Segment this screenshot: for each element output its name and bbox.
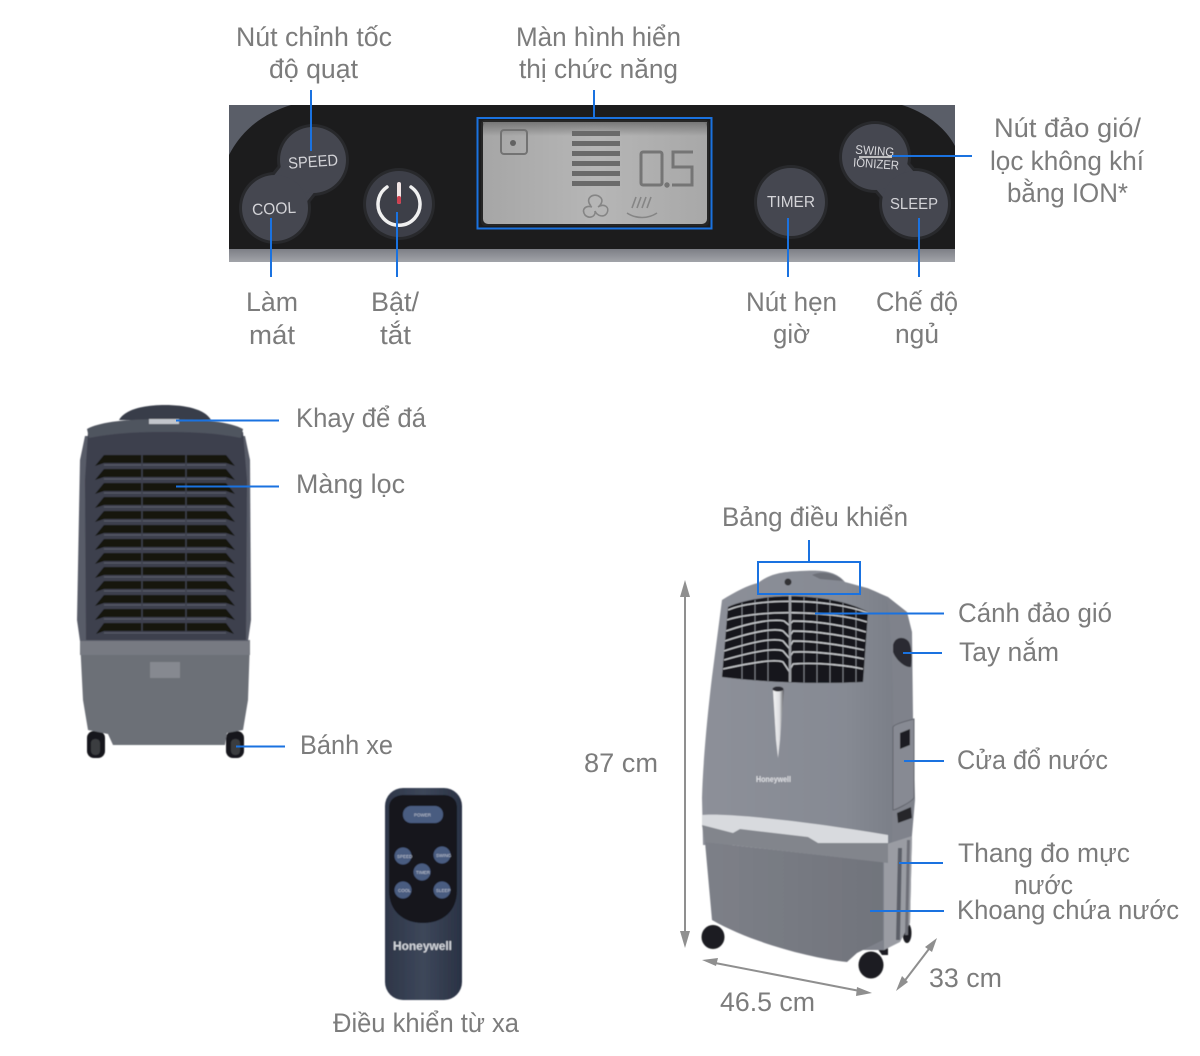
labels: front view: Cánh đảo gió xyxy=(958,598,1112,628)
callout lines: front view xyxy=(758,540,944,911)
side panel xyxy=(860,588,915,950)
labels: control panel: mát xyxy=(249,320,296,350)
dimension arrow: width xyxy=(702,958,872,996)
remote brand: Honeywell xyxy=(393,939,452,953)
dimension arrow: height xyxy=(680,580,690,948)
labels: control panel: Bật/ xyxy=(371,287,419,317)
labels: control panel: độ quạt xyxy=(269,54,358,84)
LCD drop icon xyxy=(501,130,527,154)
button: swing and sleep: IONIZER xyxy=(853,155,899,173)
chrome strip xyxy=(773,687,784,758)
button: timer: TIMER xyxy=(767,194,815,211)
labels: front view xyxy=(584,502,1179,1017)
labels: front view: Bảng điều khiển xyxy=(722,502,908,532)
remote button text: POWER xyxy=(414,812,432,818)
remote button text: SWING xyxy=(436,853,452,858)
product: front view cooler xyxy=(702,571,915,978)
labels: rear view xyxy=(296,403,427,760)
callout lines: control panel xyxy=(271,90,972,277)
tank xyxy=(705,842,883,962)
remote button text: SLEEP xyxy=(436,888,451,893)
white band xyxy=(702,815,888,843)
louver grille xyxy=(722,594,868,683)
labels: control panel: bằng ION* xyxy=(1007,177,1128,208)
upper shell xyxy=(702,571,893,845)
rear body wings xyxy=(77,436,251,641)
button: timer xyxy=(754,165,828,239)
panel dot xyxy=(784,578,792,586)
product: rear view cooler xyxy=(77,405,251,758)
rear top cap xyxy=(87,419,243,438)
labels: front view: 46.5 cm xyxy=(720,987,815,1017)
panel right corner xyxy=(902,105,955,146)
labels: front view: Tay nắm xyxy=(959,636,1059,667)
remote button text: COOL xyxy=(398,888,411,893)
labels: rear view: Màng lọc xyxy=(296,469,405,499)
LCD swing icon xyxy=(627,197,657,218)
button: speed and cool xyxy=(239,124,349,244)
water door xyxy=(893,719,914,810)
rear dark panel xyxy=(85,432,247,640)
water gauge xyxy=(896,807,912,940)
panel left corner xyxy=(229,105,291,155)
rear top dome xyxy=(119,405,211,420)
labels: control panel: ngủ xyxy=(895,319,939,349)
brand: Honeywell xyxy=(756,774,791,784)
LCD screen xyxy=(481,120,709,226)
handle xyxy=(893,638,912,667)
LCD digits xyxy=(641,152,693,186)
LCD fan icon xyxy=(584,195,608,217)
rear wheels xyxy=(87,731,244,758)
labels: control panel: giờ xyxy=(773,319,810,349)
labels: control panel: Làm xyxy=(246,287,298,317)
button: speed and cool: COOL xyxy=(252,200,297,219)
front wheels xyxy=(702,923,912,978)
labels: control panel: Chế độ xyxy=(876,287,958,317)
rear lower tank xyxy=(80,640,250,745)
labels: rear view: Khay để đá xyxy=(296,403,427,433)
labels: front view: Thang đo mực xyxy=(958,838,1130,868)
labels: control panel: Nút đảo gió/ xyxy=(994,113,1141,143)
button: power xyxy=(363,168,435,240)
remote button text: SPEED xyxy=(397,854,413,859)
remote button text: TIMER xyxy=(416,870,431,875)
labels: front view: Khoang chứa nước xyxy=(957,895,1179,925)
label: remote: Điều khiển từ xa xyxy=(333,1008,520,1038)
panel bottom strip xyxy=(229,249,955,262)
dome highlight xyxy=(812,573,843,581)
dimension arrow: depth xyxy=(896,938,937,991)
product: remote control xyxy=(385,788,462,1000)
button: speed and cool: SPEED xyxy=(288,152,339,173)
rear louvers xyxy=(95,455,235,634)
button: swing and sleep: SLEEP xyxy=(890,196,938,213)
labels: front view: 33 cm xyxy=(929,963,1002,993)
labels: rear view: Bánh xe xyxy=(300,730,393,760)
labels: control panel: Nút chỉnh tốc xyxy=(236,22,392,52)
side column xyxy=(884,836,912,950)
button: swing and sleep: SWING xyxy=(855,143,895,159)
labels: control panel: Màn hình hiển xyxy=(516,22,681,52)
tank rim xyxy=(702,825,888,863)
labels: control panel xyxy=(236,22,1144,350)
remote buttons xyxy=(394,806,450,898)
button: swing and sleep xyxy=(839,121,951,240)
remote button text xyxy=(397,812,452,893)
labels: front view: 87 cm xyxy=(584,748,658,778)
labels: control panel: lọc không khí xyxy=(990,146,1144,176)
labels: control panel: tắt xyxy=(380,319,412,350)
labels: front view: nước xyxy=(1014,870,1073,900)
callout lines: rear view xyxy=(176,420,285,746)
control panel xyxy=(229,105,955,262)
labels: control panel: Nút hẹn xyxy=(746,287,837,317)
labels: control panel: thị chức năng xyxy=(519,54,678,84)
LCD level bars xyxy=(572,131,620,186)
remote button area xyxy=(389,795,457,923)
labels: front view: Cửa đổ nước xyxy=(957,745,1108,775)
